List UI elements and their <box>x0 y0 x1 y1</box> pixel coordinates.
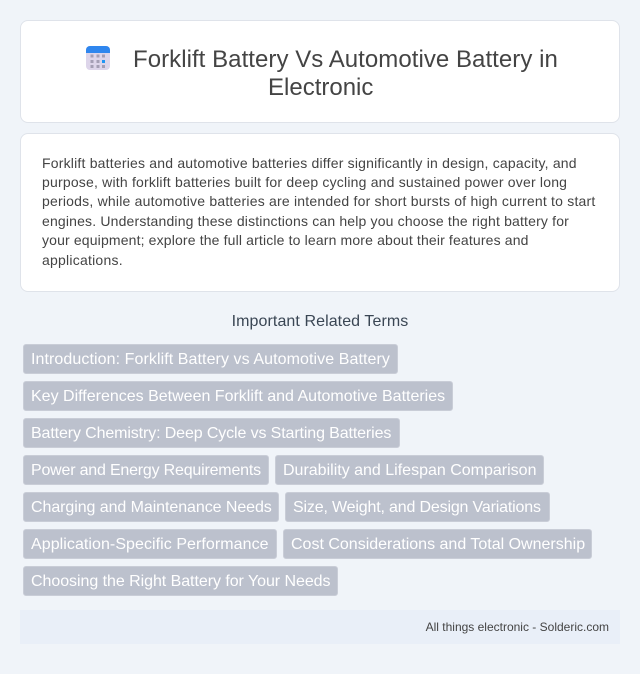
summary panel <box>20 133 620 292</box>
tag: Introduction: Forklift Battery vs Automotive Battery <box>31 351 390 368</box>
summary text <box>42 155 596 268</box>
header panel <box>20 20 620 123</box>
summary text: purpose, with forklift batteries built for deep cycling and sustained power over long <box>42 174 567 190</box>
footer credit: All things electronic - Solderic.com <box>426 620 609 634</box>
tag: Key Differences Between Forklift and Automotive Batteries <box>31 388 445 405</box>
tag: Charging and Maintenance Needs <box>31 499 272 516</box>
tag <box>23 566 338 596</box>
summary text: periods, while automotive batteries are intended for short bursts of high current to start <box>42 193 596 209</box>
tag list <box>23 344 592 596</box>
tag: Application-Specific Performance <box>31 536 269 553</box>
tag <box>283 529 592 559</box>
summary text: Forklift batteries and automotive batteries differ significantly in design, capacity, and <box>42 155 577 171</box>
title <box>133 46 558 101</box>
title: Electronic <box>268 74 373 101</box>
footer bar <box>20 610 620 644</box>
icon: calendar <box>86 46 110 70</box>
tag: Durability and Lifespan Comparison <box>283 462 536 479</box>
tag: Cost Considerations and Total Ownership <box>291 536 585 553</box>
tag <box>23 344 398 374</box>
tag <box>23 455 269 485</box>
tag: Power and Energy Requirements <box>31 462 261 479</box>
tag <box>275 455 544 485</box>
title: Forklift Battery Vs Automotive Battery in <box>133 46 558 73</box>
related terms heading: Important Related Terms <box>232 313 408 330</box>
tag <box>23 492 279 522</box>
tag: Battery Chemistry: Deep Cycle vs Starting Batteries <box>31 425 391 442</box>
tag <box>23 381 453 411</box>
tag: Choosing the Right Battery for Your Needs <box>31 573 330 590</box>
summary text: applications. <box>42 252 123 268</box>
summary text: engines. Understanding these distinctions can help you choose the right battery for <box>42 213 569 229</box>
tag: Size, Weight, and Design Variations <box>293 499 541 516</box>
tag <box>285 492 550 522</box>
tag <box>23 529 277 559</box>
tag <box>23 418 400 448</box>
summary text: your equipment; explore the full article to learn more about their features and <box>42 232 529 248</box>
